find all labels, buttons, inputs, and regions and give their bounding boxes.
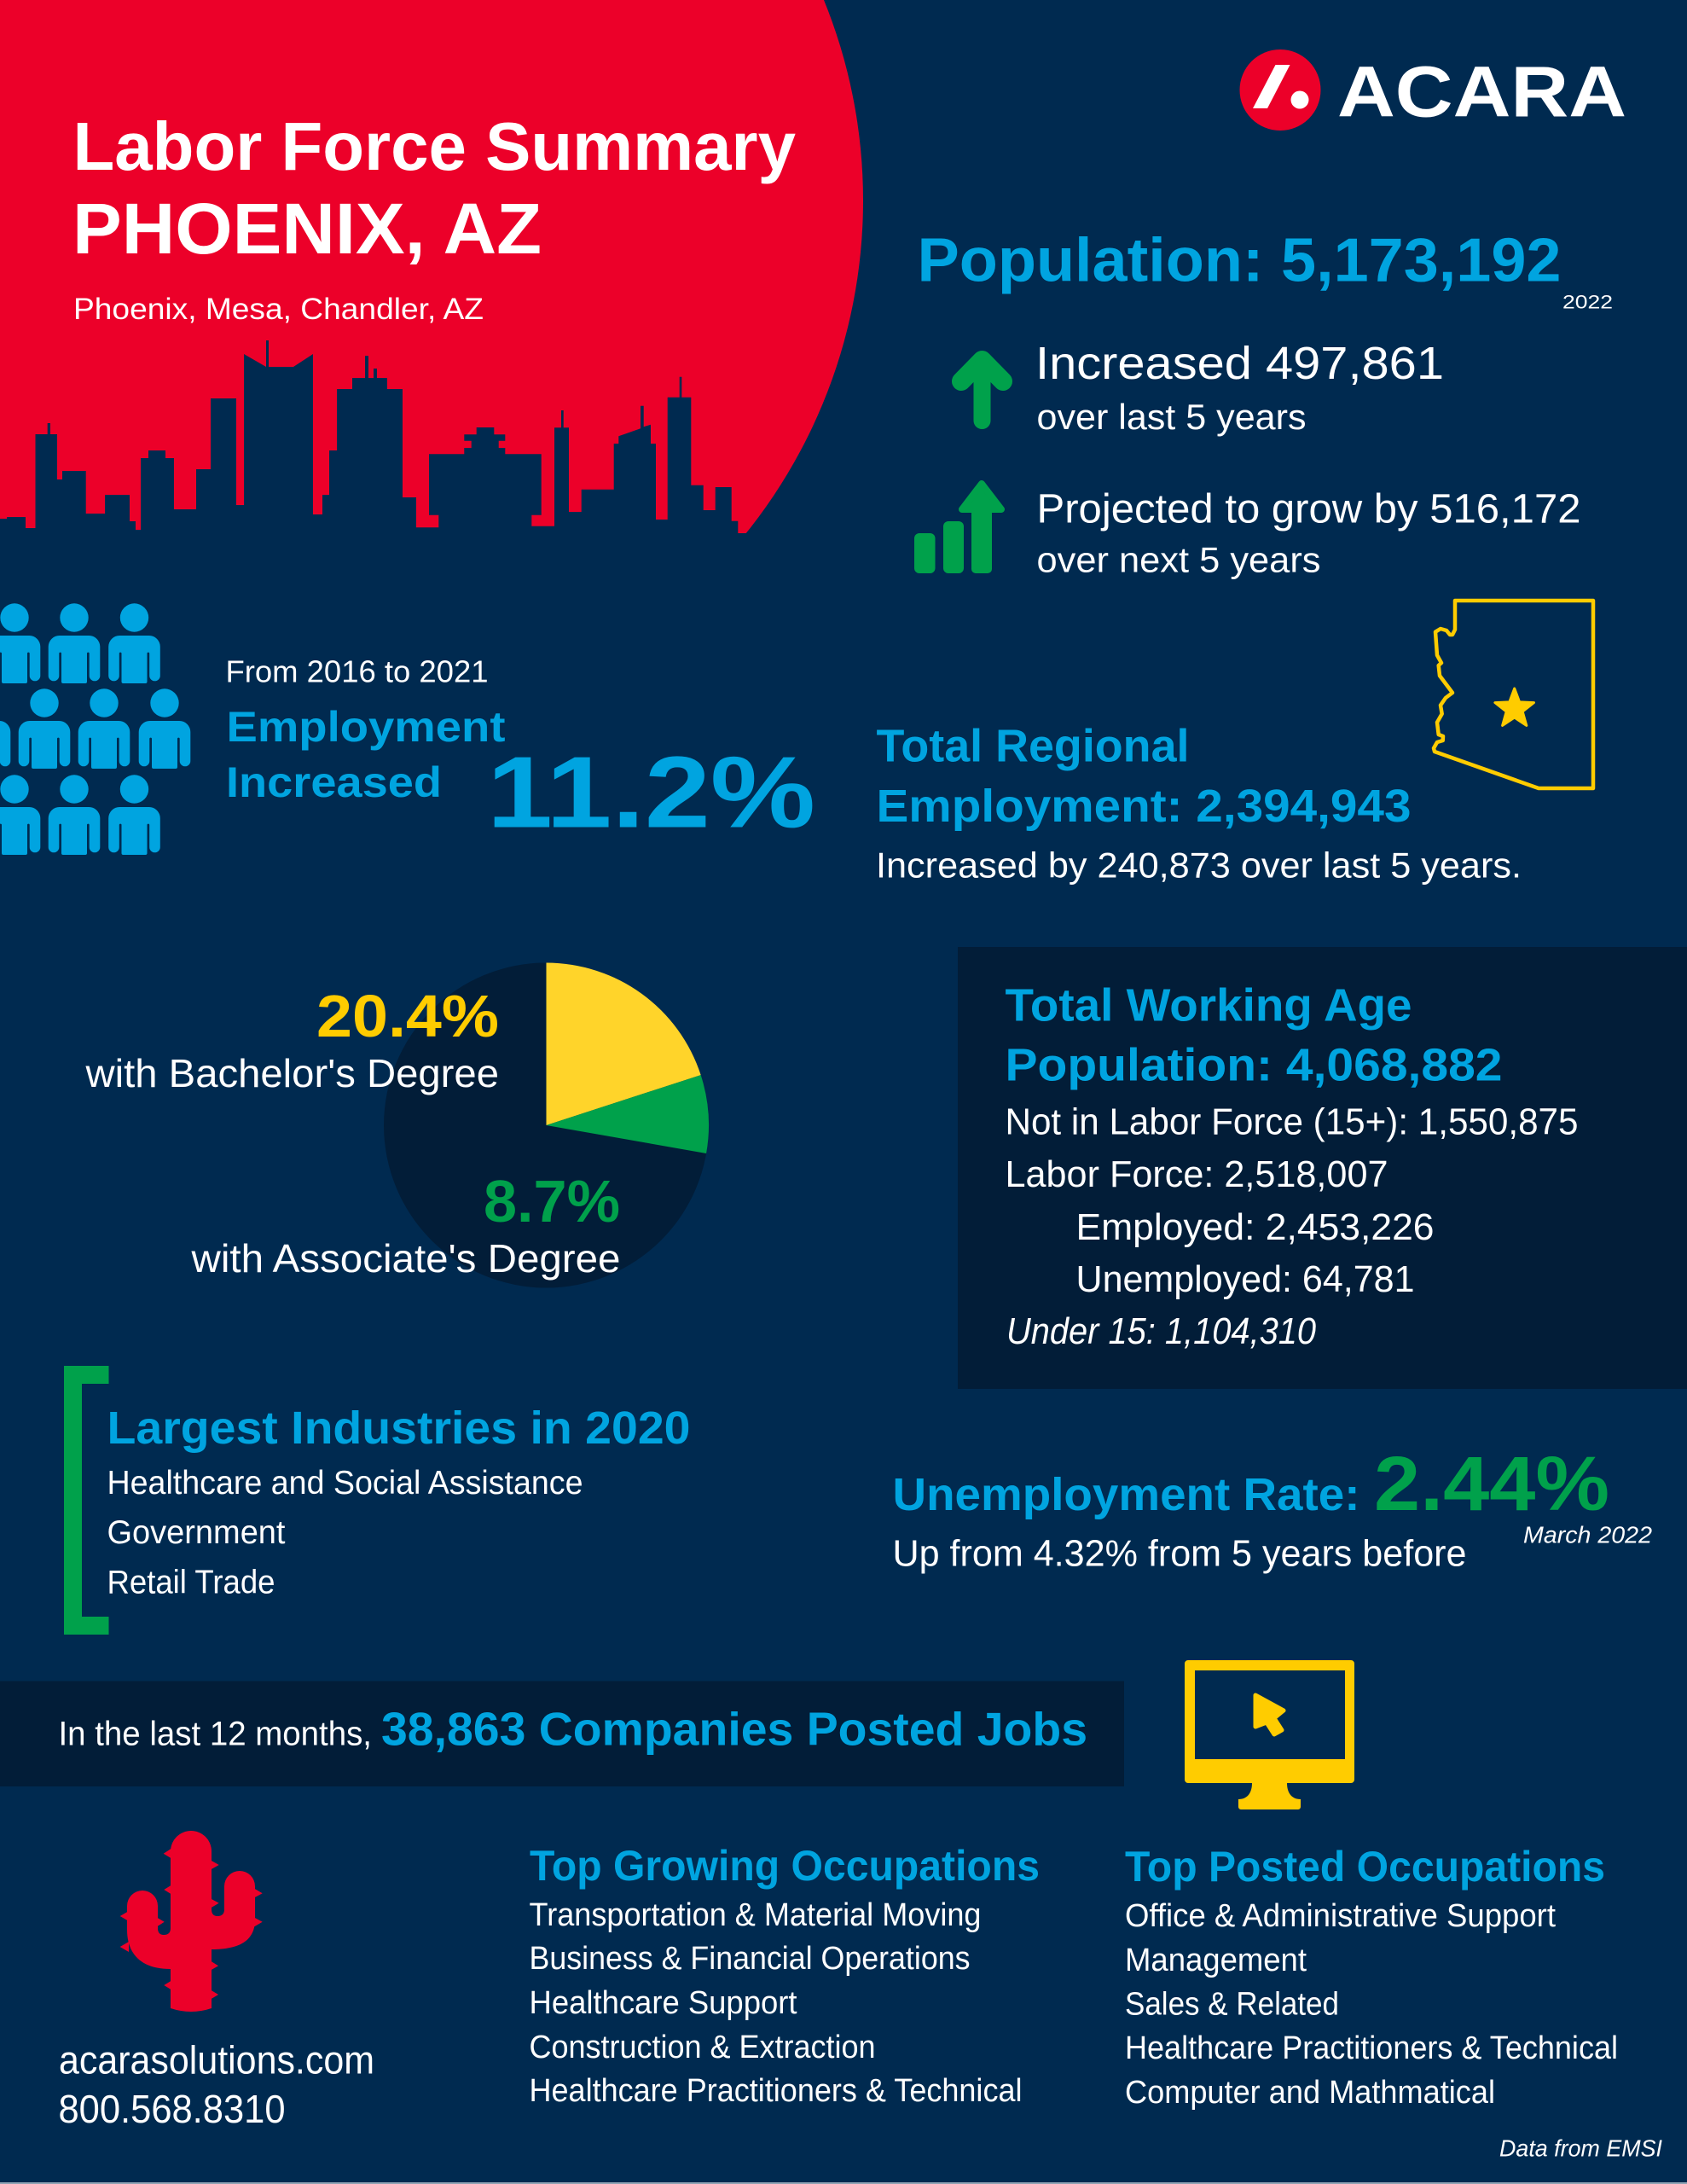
panel: working age population <box>958 947 1687 1389</box>
title: PHOENIX, AZ <box>72 189 542 269</box>
panel heading <box>1005 979 1503 1090</box>
contact details <box>58 2037 374 2131</box>
subtitle: Phoenix, Mesa, Chandler, AZ <box>73 293 484 326</box>
top growing occupations: Top Growing Occupations <box>530 1842 1040 1890</box>
icon: people group <box>0 603 190 855</box>
total regional employment: Increased by 240,873 over last 5 years. <box>876 845 1522 886</box>
largest industries list: Largest Industries in 2020 <box>107 1403 691 1454</box>
top growing occupations: Transportation & Material Moving <box>529 1897 981 1933</box>
population heading: Population: 5,173,192 <box>918 227 1561 295</box>
largest industries list: Healthcare and Social Assistance <box>107 1465 583 1502</box>
top posted occupations: Computer and Mathmatical <box>1125 2075 1495 2111</box>
total regional employment <box>876 720 1522 886</box>
panel figures: Employed: 2,453,226 <box>1076 1206 1435 1248</box>
bachelor's degree label: with Bachelor's Degree <box>84 1051 499 1095</box>
total regional employment: Employment: 2,394,943 <box>877 781 1411 832</box>
associate's degree label: 8.7% <box>484 1168 620 1234</box>
employment increased stat: 11.2% <box>487 735 815 850</box>
icon: computer monitor with cursor <box>1185 1660 1354 1809</box>
panel figures: Under 15: 1,104,310 <box>1006 1310 1316 1352</box>
contact details: 800.568.8310 <box>58 2087 285 2131</box>
panel figures: Not in Labor Force (15+): 1,550,875 <box>1005 1101 1578 1143</box>
data source note: Data from EMSI <box>1499 2135 1662 2162</box>
population projection text: Projected to grow by 516,172 <box>1037 486 1581 532</box>
associate's degree label: with Associate's Degree <box>190 1236 621 1281</box>
top growing occupations: Healthcare Practitioners & Technical <box>529 2073 1022 2109</box>
panel figures <box>1005 1101 1578 1352</box>
logo: ACARA <box>1240 49 1626 131</box>
panel heading: Population: 4,068,882 <box>1005 1039 1503 1090</box>
icon: green up arrow <box>961 360 1003 421</box>
title <box>72 108 797 269</box>
top growing occupations: Business & Financial Operations <box>529 1941 971 1977</box>
population increase text <box>1035 338 1444 437</box>
bachelor's degree label <box>84 983 499 1095</box>
panel figures: Unemployed: 64,781 <box>1076 1258 1414 1300</box>
employment increased stat <box>225 653 815 850</box>
population increase text: Increased 497,861 <box>1035 338 1444 389</box>
largest industries list <box>107 1403 691 1600</box>
largest industries list: Retail Trade <box>107 1565 275 1600</box>
banner: companies posted jobs <box>0 1681 1124 1786</box>
largest industries list: Government <box>107 1514 286 1551</box>
total regional employment: Total Regional <box>877 720 1189 771</box>
banner: companies posted jobs: In the last 12 months, <box>58 1715 372 1752</box>
top posted occupations: Management <box>1125 1943 1307 1978</box>
pie chart: education <box>384 962 709 1288</box>
top growing occupations <box>529 1842 1040 2109</box>
top growing occupations: Healthcare Support <box>529 1985 797 2021</box>
title: Labor Force Summary <box>73 108 797 184</box>
icon: Arizona outline with star <box>1434 601 1593 788</box>
employment increased stat: Increased <box>226 758 442 806</box>
header: red sun with skyline <box>0 0 938 768</box>
unemployment rate: 2.44% <box>1374 1442 1609 1527</box>
population projection text: over next 5 years <box>1037 539 1320 580</box>
top posted occupations: Office & Administrative Support <box>1125 1898 1556 1934</box>
top posted occupations: Sales & Related <box>1125 1986 1339 2022</box>
panel heading: Total Working Age <box>1005 979 1412 1031</box>
contact details: acarasolutions.com <box>59 2037 374 2082</box>
associate's degree label <box>190 1168 621 1281</box>
population increase text: over last 5 years <box>1037 397 1307 437</box>
green bracket <box>64 1366 109 1635</box>
unemployment rate <box>892 1442 1652 1575</box>
top posted occupations: Healthcare Practitioners & Technical <box>1125 2030 1618 2066</box>
population projection text <box>1037 486 1581 580</box>
population heading: 2022 <box>1562 292 1613 312</box>
unemployment rate: Up from 4.32% from 5 years before <box>892 1532 1467 1575</box>
top posted occupations: Top Posted Occupations <box>1125 1843 1605 1891</box>
logo: ACARA: ACARA <box>1337 51 1626 131</box>
top posted occupations <box>1125 1843 1618 2111</box>
top growing occupations: Construction & Extraction <box>529 2030 875 2065</box>
employment increased stat: From 2016 to 2021 <box>225 653 488 689</box>
unemployment rate: Unemployment Rate: <box>892 1469 1359 1520</box>
unemployment rate: March 2022 <box>1523 1522 1652 1548</box>
panel figures: Labor Force: 2,518,007 <box>1005 1153 1388 1195</box>
icon: red cactus <box>120 1831 263 2012</box>
bachelor's degree label: 20.4% <box>316 983 499 1049</box>
employment increased stat: Employment <box>227 703 506 751</box>
banner: companies posted jobs: 38,863 Companies Posted Jobs <box>381 1703 1087 1756</box>
icon: green growth bars <box>914 484 1001 573</box>
